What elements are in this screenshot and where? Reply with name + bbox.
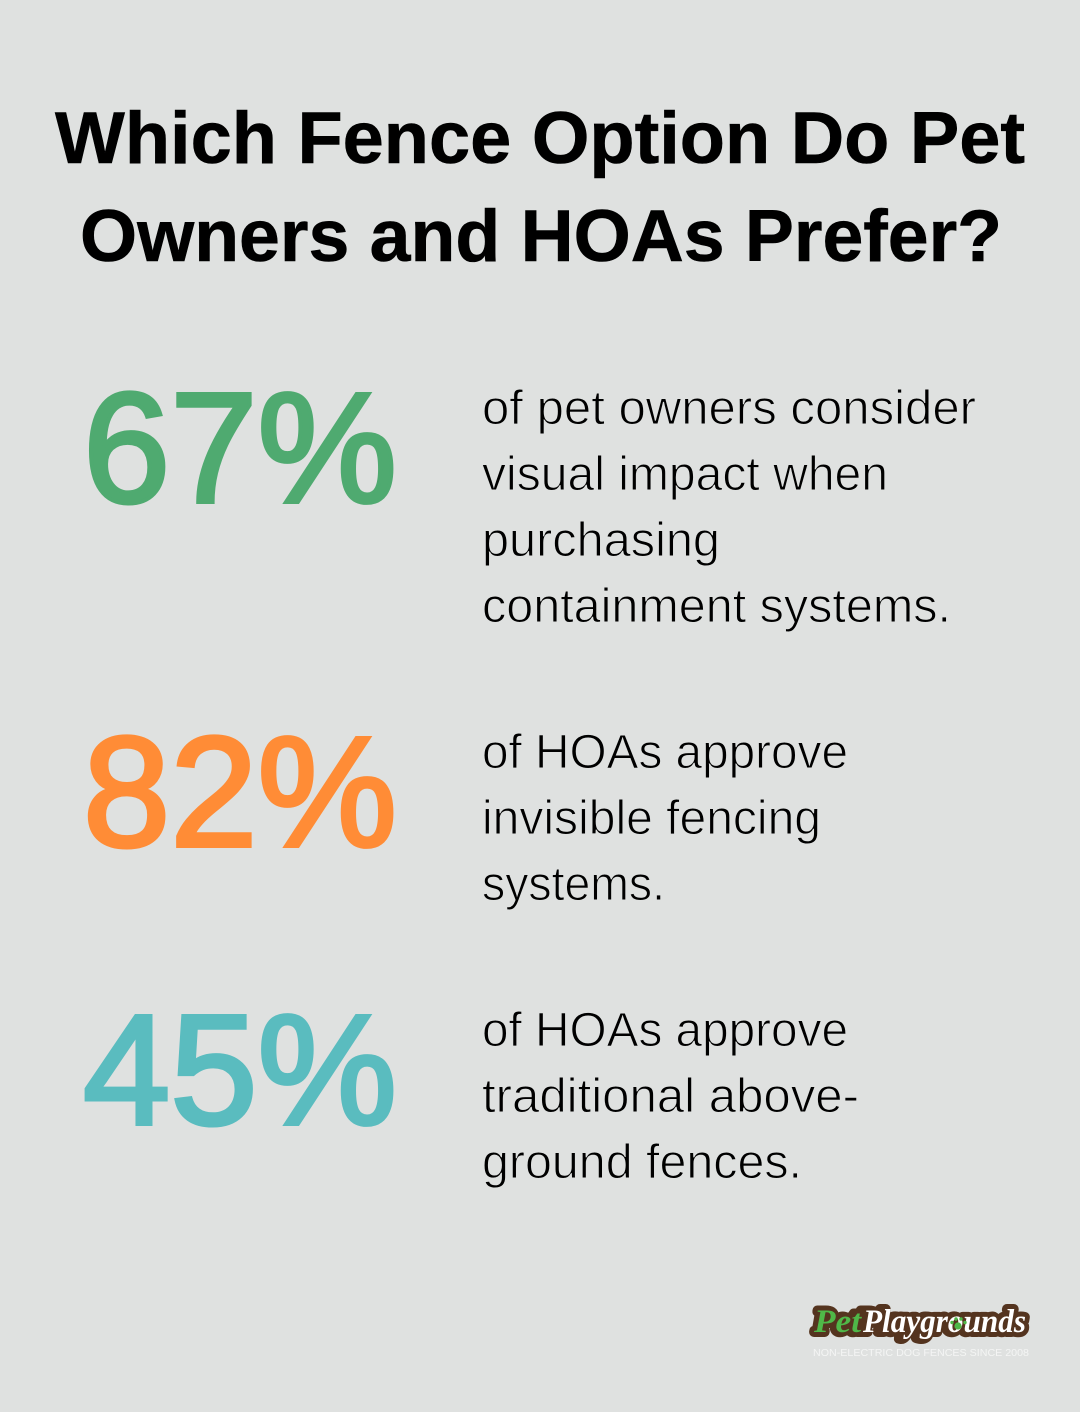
stat: 45%: 45%	[83, 983, 397, 1158]
logo: Pet Playgrounds: Pet	[813, 1304, 862, 1340]
tagline: NON-ELECTRIC DOG FENCES SINCE 2008	[813, 1348, 1029, 1359]
text: 82% description	[482, 726, 848, 911]
text: 45% description: of HOAs approve	[482, 1004, 848, 1057]
text: 67% description: containment systems.	[482, 580, 951, 633]
title: Which Fence Option Do Pet	[55, 98, 1025, 179]
logo: Pet Playgrounds	[813, 1304, 1029, 1359]
logo: Pet Playgrounds: PetPlaygrounds	[813, 1304, 1026, 1340]
logo: Pet Playgrounds: Playgrounds	[862, 1304, 1026, 1340]
stat: 82%: 82%	[83, 705, 397, 880]
icon: paw	[950, 1317, 967, 1330]
stat: 67%: 67%	[83, 361, 397, 536]
title	[55, 98, 1025, 277]
text: 82% description: systems.	[482, 858, 665, 911]
text: 67% description: purchasing	[482, 514, 720, 567]
text: 45% description	[482, 1004, 859, 1189]
text: 67% description	[482, 382, 976, 633]
text: 67% description: of pet owners consider	[482, 382, 976, 435]
text: 82% description: of HOAs approve	[482, 726, 848, 779]
text: 45% description: ground fences.	[482, 1136, 802, 1189]
text: 82% description: invisible fencing	[482, 792, 821, 845]
title: Owners and HOAs Prefer?	[80, 196, 1002, 277]
text: 67% description: visual impact when	[482, 448, 888, 501]
text: 45% description: traditional above-	[482, 1070, 859, 1123]
